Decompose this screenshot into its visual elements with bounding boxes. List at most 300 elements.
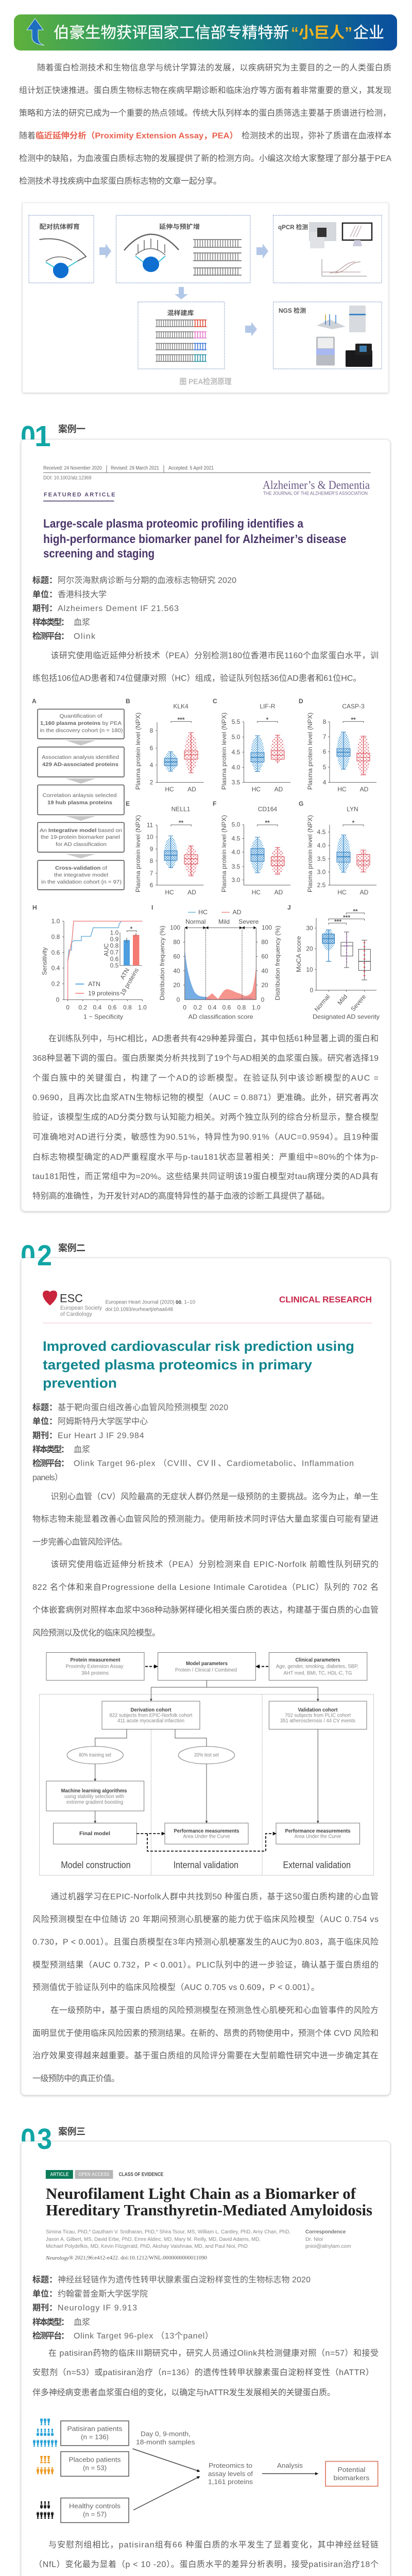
chart G: LYN box plot: 3.5: [317, 855, 326, 862]
chart C: LIF-R box plot: Plasma protein level (NPX): [220, 713, 228, 790]
chart F: CD164 box plot: **: [265, 819, 270, 826]
arrow to external validation: [317, 1729, 318, 1823]
paper header: ESC: European Heart Journal (2020) 00, 1–10: [106, 1299, 195, 1306]
chart C: LIF-R box plot: *: [266, 716, 269, 723]
chart J: MoCA score box plot: [287, 904, 380, 1021]
figure A: workflow: [32, 698, 124, 890]
chart H: ROC curve: [32, 904, 147, 1021]
paragraph: case three results: （NfL）变化最为显着（p < 10 -20）。蛋白质水平的差异分析表明，接受patisiran治疗18个: [34, 2560, 379, 2569]
chart I: score distribution: 100: [170, 924, 180, 931]
step: extension and pre-amplification: [116, 215, 250, 283]
box: clinical parameters: Clinical parameters: [296, 1657, 340, 1663]
figure A: workflow: Cross-validation of: [55, 865, 107, 871]
chart D: CASP-3 box plot: 7: [323, 733, 327, 740]
paragraph: case two results: 一级预防中的真正价值。: [32, 2074, 119, 2083]
chart I: score distribution: 40: [173, 967, 180, 974]
study metadata: 期刊：: [32, 2303, 57, 2312]
ellipse: training set: [67, 1747, 123, 1764]
paragraph: design: 伴多神经病变患者血浆蛋白组的变化，以确定与hATTR发生发展相关的关键蛋白质。: [32, 2388, 335, 2397]
chart E: NELL1 box plot: Plasma protein level (NPX): [134, 815, 142, 892]
paper header: ESC: of Cardiology: [60, 1311, 92, 1317]
study metadata: 检测平台：: [32, 2331, 69, 2341]
box: derivation cohort: 411 acute myocardial infarction: [117, 1718, 184, 1724]
box: model parameters: [158, 1653, 255, 1680]
chart J: MoCA score box plot: 0: [310, 987, 314, 994]
chart B: KLK4 box plot: 8: [150, 727, 153, 734]
figure A: workflow: Correlation anlaysis selected: [42, 792, 117, 799]
box: placebo: Placebo patients: [69, 2455, 121, 2464]
chart J: MoCA score box plot: **: [353, 908, 358, 915]
section number 02: 2: [37, 1239, 52, 1272]
paragraph: background and design: 该研究使用临近延伸分析技术（PEA）分别检测来自 EPIC-Norfolk 前瞻性队列研究的: [50, 1560, 379, 1569]
arrow: samples to proteomics: [133, 2449, 200, 2471]
chart J: MoCA score box plot: MoCA score: [295, 936, 302, 972]
arrow to derivation cohort: [150, 1687, 151, 1701]
panel: case three: [21, 2141, 390, 2576]
box: clinical parameters: Age, gender, smoking, diabetes, SBP,: [276, 1664, 358, 1669]
inset: AUC bars: ATN: [118, 967, 131, 981]
section number 03: [22, 2128, 52, 2149]
chart E: NELL1 box plot: NELL1: [171, 806, 191, 813]
paper header: ESC: Improved cardiovascular risk prediction using: [43, 1338, 354, 1354]
chart I: score distribution: 0: [261, 996, 265, 1003]
paper header: Neurology: Dr. Nioi: [305, 2236, 323, 2242]
dashed arrow to external validation: [147, 1834, 276, 1851]
study metadata: 期刊：: [32, 1431, 57, 1440]
chart J: MoCA score box plot: Normal: [313, 993, 331, 1013]
chart H: ROC curve: 0.8: [123, 1004, 132, 1011]
box: derivation cohort: 822 subjects from EPIC-Norfolk cohort: [109, 1713, 193, 1719]
chart F: CD164 box plot: [213, 800, 290, 896]
intro paragraph: 检测技术寻找疾病中血浆蛋白质标志物的文章一起分享。: [19, 176, 221, 185]
figure A: workflow: in the validation cohort (n = 97): [41, 879, 122, 885]
study metadata: 香港科技大学: [58, 590, 107, 599]
paper header: [43, 465, 371, 560]
step: NGS detection: NGS 检测: [279, 307, 306, 314]
step: paired antibody incubation: [29, 215, 94, 283]
paper header: THE JOURNAL OF THE ALZHEIMER’S ASSOCIATION: [263, 490, 368, 497]
chart G: LYN box plot: 4.5: [317, 828, 326, 836]
chart F: CD164 box plot: CD164: [258, 806, 277, 813]
chart E: NELL1 box plot: 10: [146, 834, 153, 841]
box: performance internal: Performance measurements: [174, 1828, 239, 1834]
study metadata: 样本类型：: [32, 617, 69, 627]
paragraph: study design: 练包括106位AD患者和74位健康对照（HC）组成，验证队列包括36位AD患者和61位HC。: [32, 674, 362, 683]
chart I: score distribution: HC: [198, 909, 208, 916]
paragraph: case one results: [32, 1034, 379, 1200]
intro paragraph: 临近延伸分析（Proximity Extension Assay，PEA）: [36, 131, 238, 140]
chart H: ROC curve: 1.0: [52, 918, 60, 925]
chart J: MoCA score box plot: ***: [343, 914, 350, 921]
paragraph: design: 在 patisiran药物的临床Ⅲ期研究中，研究人员通过Olink共检测健康对照（n=57）和接受: [48, 2348, 379, 2358]
chart D: CASP-3 box plot: **: [351, 716, 356, 723]
chart C: LIF-R box plot: 4.0: [232, 764, 241, 771]
paper header: ESC: prevention: [43, 1376, 117, 1391]
chart D: CASP-3 box plot: D: [299, 698, 303, 705]
caption: 图 PEA检测原理: [179, 377, 232, 386]
chart B: KLK4 box plot: 2: [150, 779, 153, 786]
icon: placebo patients: [36, 2456, 54, 2475]
stage labels: External validation: [283, 1860, 351, 1870]
flow chart: study design: [39, 1653, 374, 1875]
chart I: score distribution: 60: [261, 953, 268, 960]
section number 03: 3: [37, 2123, 52, 2156]
chart I: score distribution: [151, 904, 281, 1021]
dashed arrow left: [256, 1666, 268, 1667]
paragraph: case one results: 368种显著下调的蛋白。蛋白质聚类分析共找到了19个与AD相关的血浆蛋白簇。研究者选择19: [32, 1054, 379, 1063]
chart D: CASP-3 box plot: [299, 698, 376, 793]
chart B: KLK4 box plot: ***: [177, 716, 185, 723]
chart J: MoCA score box plot: 20: [306, 945, 313, 952]
paragraph: case one results: tau181阳性，而正常组中为≈20%。这些结果共同证明该19蛋白模型对tau病理分类的AD具有: [32, 1172, 379, 1181]
paragraph: case two results: 通过机器学习在EPIC-Norfolk人群中共找到50 种蛋白质，基于这50蛋白质构建的心血管: [50, 1892, 379, 1901]
box: model parameters: Protein / Clinical / Combined: [175, 1667, 237, 1673]
box: validation cohort: 351 atherosclerosis / 44 CV events: [280, 1718, 355, 1724]
chart I: score distribution: Distribution frequency (%): [159, 925, 166, 1001]
section number 02: [22, 1245, 51, 1265]
arrows to model boxes: [95, 1764, 96, 1781]
chart H: ROC curve: 0.2: [52, 980, 60, 988]
chart G: LYN box plot: LYN: [347, 806, 358, 813]
chart F: CD164 box plot: F: [213, 800, 216, 807]
chart D: CASP-3 box plot: 6: [323, 748, 327, 755]
paragraph: study design: [32, 651, 379, 683]
chart H: ROC curve: 0.4: [52, 964, 60, 972]
paragraph: case one results: 特别高的准确性，为开发针对AD的高度特异性的基于血液的诊断工具提供了基础。: [32, 1191, 330, 1200]
study metadata: [32, 1403, 354, 1482]
step: qPCR detection: qPCR 检测: [278, 223, 308, 231]
chart E: NELL1 box plot: HC: [165, 889, 174, 896]
chart E: NELL1 box plot: 8: [150, 857, 153, 865]
chart B: KLK4 box plot: B: [126, 698, 130, 705]
study metadata: Neurology IF 9.913: [58, 2304, 137, 2312]
arrow: [99, 244, 111, 259]
paper header: high-performance biomarker panel for Alzheimer’s disease: [43, 532, 346, 546]
paper header: ESC: doi:10.1093/eurheartj/ehaa648: [106, 1307, 173, 1313]
study metadata: 阿姆斯特丹大学医学中心: [58, 1417, 148, 1426]
chart I: score distribution: Normal: [185, 918, 206, 925]
figure A: workflow: the integrative model: [54, 872, 108, 878]
box: healthy: [61, 2498, 129, 2522]
section number 01: 0: [21, 420, 36, 453]
study metadata: 期刊：: [32, 604, 57, 613]
chart I: score distribution: 20: [173, 981, 180, 989]
inset: AUC bars: 0.9: [110, 936, 119, 943]
chart G: LYN box plot: [299, 800, 376, 896]
chart I: score distribution: 80: [173, 939, 180, 946]
study metadata: 样本类型：: [32, 1445, 69, 1454]
step: extension and pre-amplification: 延伸与预扩增: [159, 223, 200, 230]
study metadata: [32, 576, 236, 641]
chart F: CD164 box plot: 4.0: [232, 849, 241, 856]
box: validation cohort: Validation cohort: [298, 1707, 338, 1713]
inset: AUC bars: [103, 925, 142, 997]
chart F: CD164 box plot: Plasma protein level (NPX): [220, 815, 228, 892]
paragraph: case two results: 治疗效果变得越来越重要。基于蛋白质组的风险评分需要在大型前瞻性研究中进一步确定其在: [32, 2051, 379, 2060]
paragraph: case one results: 0.9690，且再次比血浆ATN生物标记物的模型（AUC = 0.8871）更准确。此外，研究者再次: [32, 1093, 379, 1103]
study metadata: Alzheimers Dement IF 21.563: [58, 604, 179, 613]
chart D: CASP-3 box plot: Plasma protein level (NPX): [306, 713, 314, 790]
chart H: ROC curve: 0: [56, 996, 60, 1003]
section heading: case two: 案例二: [58, 1243, 85, 1253]
chart H: ROC curve: ATN: [88, 980, 100, 988]
paragraph: case one results: 在训练队列中，与HC相比，AD患者共有429种差异蛋白，其中包括61种显著上调的蛋白和: [48, 1034, 379, 1043]
box: potential biomarkers: Potential: [338, 2466, 366, 2473]
paper header: ESC: European Society: [60, 1305, 102, 1311]
analysis arrow: Analysis: [277, 2462, 303, 2469]
chart G: LYN box plot: AD: [360, 889, 369, 896]
chart I: score distribution: I: [151, 904, 153, 911]
step: library pooling: [138, 302, 225, 369]
paragraph: case two results: 面明显优于使用临床风险因素的预测结果。在新的、昂贵的药物使用中，预测个体 CVD 风险和: [32, 2028, 379, 2038]
paragraph: case two results: 0.730，P < 0.001）。且蛋白质模型在3年内预测心肌梗塞发生的AUC为0.803，高于临床风险: [32, 1937, 379, 1946]
chart I: score distribution: 1.0: [252, 1004, 261, 1011]
paragraph: background and design: 一步完善心血管风险评估。: [32, 1537, 127, 1547]
paragraph: case one results: 验证，该模型生成的AD分类分数与认知能力相关。对两个独立队列的综合分析显示，整合模型: [32, 1113, 379, 1122]
chart B: KLK4 box plot: Plasma protein level (NPX): [134, 713, 142, 790]
box: healthy: (n = 57): [83, 2510, 107, 2518]
section number 01: [22, 426, 50, 446]
chart I: score distribution: 0.8: [237, 1004, 246, 1011]
box: healthy: Healthy controls: [69, 2502, 121, 2510]
chart H: ROC curve: 0.6: [108, 1004, 117, 1011]
figure A: workflow: 19 hub plasma proteins: [47, 800, 112, 806]
chart C: LIF-R box plot: C: [213, 698, 217, 705]
box: protein measurement: Protein measurement: [70, 1657, 121, 1663]
box: protein measurement: Proximity Extension Assay: [66, 1664, 124, 1669]
section number 02: 0: [21, 1239, 36, 1272]
inset: AUC bars: *: [130, 925, 133, 933]
box: machine learning: Machine learning algorithms: [61, 1788, 127, 1794]
chart J: MoCA score box plot: Severe: [349, 993, 368, 1013]
sample timepoints label: 18-month samples: [136, 2438, 195, 2446]
box: potential biomarkers: biomarkers: [334, 2474, 370, 2482]
title banner: 伯豪生物获评国家工信部专精特新: [54, 25, 289, 41]
chart I: score distribution: 60: [173, 953, 180, 960]
chart H: ROC curve: 1.0: [138, 1004, 147, 1011]
study metadata: 单位：: [32, 589, 57, 599]
box: performance external: Area Under the Curve: [295, 1834, 341, 1839]
arrow down: [175, 287, 188, 299]
study metadata: Olink Target 96-plex （CVⅢ、CVⅡ、Cardiometabolic、Inflammation: [74, 1459, 354, 1468]
chart I: score distribution: Mild: [218, 918, 230, 925]
box: derivation cohort: [102, 1701, 200, 1729]
chart B: KLK4 box plot: [126, 698, 203, 793]
box: model parameters: Model parameters: [186, 1661, 228, 1667]
icon: ESC heart: [43, 1291, 57, 1306]
icon: patisiran patients: [32, 2418, 57, 2447]
section heading: case three: 案例三: [58, 2126, 85, 2137]
study metadata: 检测平台：: [32, 1458, 69, 1468]
paragraph: case two results: 风险预测模型在中位随访 20 年期间预测心肌梗塞的能力优于临床风险模型（AUC 0.754 vs: [32, 1914, 379, 1924]
chart I: score distribution: 0.2: [194, 1004, 202, 1011]
study metadata: 阿尔茨海默病诊断与分期的血液标志物研究 2020: [58, 576, 236, 585]
dashed arrows: [145, 1666, 158, 1667]
study metadata: 单位：: [32, 2289, 57, 2299]
box: machine learning: extreme gradient boosting: [66, 1800, 123, 1805]
chart I: score distribution: 40: [261, 967, 268, 974]
intro paragraph: 检测技术的出现，弥补了质谱在血液样本: [242, 131, 391, 140]
panel: case two: [21, 1258, 390, 2095]
paper header: Neurology: pnioi@alnylam.com: [305, 2244, 351, 2249]
figure A: workflow: 1,160 plasma proteins by PEA: [40, 720, 122, 726]
arrow to final model: [95, 1811, 96, 1823]
study metadata: 样本类型：: [32, 2317, 69, 2327]
chart H: ROC curve: 0: [66, 1004, 70, 1011]
box: final model: [54, 1823, 136, 1844]
chart I: score distribution: 0.4: [208, 1004, 217, 1011]
stage labels: Internal validation: [174, 1860, 238, 1870]
chart D: CASP-3 box plot: AD: [360, 786, 369, 793]
chart D: CASP-3 box plot: 5: [323, 764, 327, 771]
paragraph: case two results: 预测值优于验证队列中的临床风险模型（AUC 0.705 vs 0.609，P < 0.001）。: [32, 1982, 319, 1992]
chart E: NELL1 box plot: AD: [187, 889, 196, 896]
inset: AUC bars: 19 proteins: [118, 967, 140, 997]
step: paired antibody incubation: 配对抗体孵育: [39, 223, 80, 230]
chart C: LIF-R box plot: [213, 698, 290, 793]
paper header: screening and staging: [43, 547, 154, 560]
icon: healthy controls: [36, 2501, 54, 2519]
paragraph: background and design: 识别心血管（CV）风险最高的无症状人群仍然是一级预防的主要挑战。迄今为止，单一生: [50, 1492, 379, 1501]
study metadata: 单位：: [32, 1416, 57, 1426]
study metadata: 检测平台：: [32, 631, 69, 641]
inset: AUC bars: 0.5: [110, 962, 119, 969]
section number 03: 0: [21, 2123, 36, 2156]
box: patisiran: (n = 136): [81, 2433, 109, 2441]
paragraph: case one results: 可准确地对AD进行分类，敏感性为90.51%，特异性为90.91%（AUC=0.9594）。且19种蛋: [32, 1132, 379, 1142]
sample timepoints label: Day 0, 9-month,: [141, 2430, 191, 2438]
chart I: score distribution: 0.6: [222, 1004, 231, 1011]
chart C: LIF-R box plot: 5.5: [232, 718, 241, 725]
chart B: KLK4 box plot: 4: [150, 761, 153, 769]
chart E: NELL1 box plot: **: [179, 819, 183, 826]
figure A: workflow: 429 AD-associated proteins: [42, 761, 118, 768]
proteomics label: 1,161 proteins: [208, 2478, 253, 2485]
icon: upward arrow: [27, 19, 44, 45]
paragraph: case three results: [32, 2540, 379, 2576]
step: NGS detection: [273, 302, 382, 369]
diagram: proteomics workflow: [32, 2418, 378, 2522]
chart J: MoCA score box plot: 30: [306, 924, 313, 931]
chart C: LIF-R box plot: 3.5: [232, 779, 241, 786]
study metadata: Olink Target 96-plex （13个panel）: [74, 2331, 213, 2341]
chart H: ROC curve: 1 − Specificity: [83, 1013, 123, 1021]
paper header: Neurology: Neurology® 2021;96:e412-e422. doi:10.1212/WNL.0000000000011090: [45, 2256, 207, 2261]
box: performance external: [276, 1823, 359, 1844]
paragraph: background and design: 物标志物未能显着改善心血管风险的预测能力。使用新技术同时评估大量血浆蛋白可能有望进: [32, 1515, 379, 1524]
box: derivation cohort: Derivation cohort: [131, 1707, 171, 1713]
arrow: [245, 322, 257, 336]
paper header: Neurology: ARTICLE: [50, 2171, 68, 2177]
box: final model: Final model: [79, 1831, 110, 1837]
figure A: workflow: the 19-protein biomarker panel: [41, 834, 120, 840]
study metadata: Olink: [74, 632, 96, 641]
arrow to internal validation: [206, 1764, 207, 1823]
chart F: CD164 box plot: AD: [274, 889, 283, 896]
chart E: NELL1 box plot: 6: [150, 882, 153, 889]
intro paragraph: 检测中的缺陷，为血液蛋白质标志物的发展提供了新的检测方向。小编这次给大家整理了部分基于PEA: [19, 154, 391, 163]
panel: case one: [21, 439, 390, 1211]
chart C: LIF-R box plot: 5.0: [232, 734, 241, 741]
chart I: score distribution: AD: [233, 909, 242, 916]
paragraph: background and design: 风险预测以及优化的临床风险模型。: [32, 1628, 160, 1637]
paper header: Accepted: 5 April 2021: [168, 466, 214, 471]
box: machine learning: [46, 1781, 144, 1811]
chart I: score distribution: AD classification score: [188, 1013, 253, 1021]
chart H: ROC curve: Sensitivity: [41, 947, 48, 975]
sample timepoints label: [136, 2430, 195, 2446]
chart I: score distribution: Severe: [238, 918, 259, 925]
ellipse: test set: 20% test set: [194, 1752, 219, 1758]
section heading: case one: 案例一: [58, 423, 85, 434]
box: performance external: Performance measurements: [285, 1828, 351, 1834]
paragraph: case three results: 与安慰剂组相比，patisiran组有66 种蛋白质的水平发生了显着变化，其中神经丝轻链: [48, 2540, 379, 2549]
study metadata: 标题：: [32, 2275, 57, 2284]
chart G: LYN box plot: Plasma protein level (NPX): [306, 815, 314, 892]
inset: AUC bars: 0.6: [110, 955, 119, 962]
paper header: Neurology: Simina Ticau, PhD,* Gautham V. Sridharan, PhD,* Shira Tsour, MS, William L. Cantley, PhD, Amy Chan, PhD,: [46, 2229, 290, 2235]
chart G: LYN box plot: 4.0: [317, 842, 326, 849]
chart C: LIF-R box plot: AD: [274, 786, 283, 793]
paper header: ESC: CLINICAL RESEARCH: [279, 1295, 372, 1304]
chart G: LYN box plot: 2.5: [317, 882, 326, 889]
chart C: LIF-R box plot: LIF-R: [260, 703, 276, 710]
box: clinical parameters: AHT med, BMI, TC, HDL-C, TG: [283, 1670, 352, 1676]
chart F: CD164 box plot: 4.5: [232, 835, 241, 842]
intro paragraph: 策略和方法的研究已成为一个重要的热点领域。传统大队列样本的蛋白质筛选主要基于质谱进行检测，: [19, 108, 391, 117]
study metadata: 血浆: [74, 618, 90, 627]
ellipse: test set: [178, 1747, 235, 1764]
chart I: score distribution: 0: [183, 1004, 186, 1011]
chart G: LYN box plot: G: [299, 800, 303, 807]
box: performance internal: [165, 1823, 248, 1844]
paper header: Neurology: [45, 2170, 372, 2261]
chart F: CD164 box plot: 3.5: [232, 863, 241, 870]
arrow: controls to proteomics: [133, 2477, 200, 2510]
paper header: Neurology: CLASS OF EVIDENCE: [119, 2171, 163, 2177]
paragraph: case one results: 个蛋白簇中的关键蛋白，构建了一个AD的诊断模型。在验证队列中该诊断模型的AUC =: [32, 1074, 379, 1083]
paragraph: background and design: 822 名个体和来自Progressione della Lesione Intimale Carotidea（PLIC）队列的 702 名: [32, 1583, 379, 1592]
box: validation cohort: [269, 1701, 367, 1729]
paper header: Alzheimer’s & Dementia: [263, 479, 370, 492]
box: protein measurement: [46, 1653, 144, 1680]
arrow: [256, 244, 268, 259]
study metadata: Eur Heart J IF 29.984: [58, 1431, 144, 1440]
proteomics label: [208, 2462, 253, 2485]
paragraph: case one results: 白标志物模型确定的AD严重程度水平与p-tau181状态显著相关：严重组中≈80%的个体为p-: [32, 1153, 379, 1162]
paper header: Neurology: Neurofilament Light Chain as a Biomarker of: [46, 2184, 356, 2202]
chart I: score distribution: 0: [177, 996, 180, 1003]
stage labels: Model construction: [61, 1860, 131, 1870]
paragraph: case two results: 在一级预防中，基于蛋白质组的风险预测模型在预测急性心肌梗死和心血管事件的风险方: [50, 2006, 379, 2015]
chart E: NELL1 box plot: 11: [147, 821, 153, 828]
chart J: MoCA score box plot: Designated AD severity: [313, 1013, 380, 1021]
box: placebo: [61, 2452, 129, 2476]
chart D: CASP-3 box plot: 8: [323, 718, 327, 725]
chart I: score distribution: 20: [261, 981, 268, 989]
chart F: CD164 box plot: 5.0: [232, 821, 241, 828]
box: patisiran: Patisiran patients: [67, 2425, 123, 2433]
title banner: [14, 14, 397, 50]
paragraph: design: 安慰剂（n=53）或patisiran治疗（n=136）的遗传性转甲状腺素蛋白淀粉样变性（hATTR）: [32, 2368, 374, 2377]
paper header: Neurology: Hereditary Transthyretin-Mediated Amyloidosis: [46, 2201, 372, 2219]
chart H: ROC curve: 0.4: [93, 1004, 101, 1011]
box: clinical parameters: [269, 1653, 367, 1680]
study metadata: panels）: [32, 1473, 63, 1482]
figure A: workflow: Association analysis identified: [42, 754, 119, 760]
paper header: ESC: [43, 1291, 372, 1391]
title banner: 企业: [353, 25, 384, 41]
